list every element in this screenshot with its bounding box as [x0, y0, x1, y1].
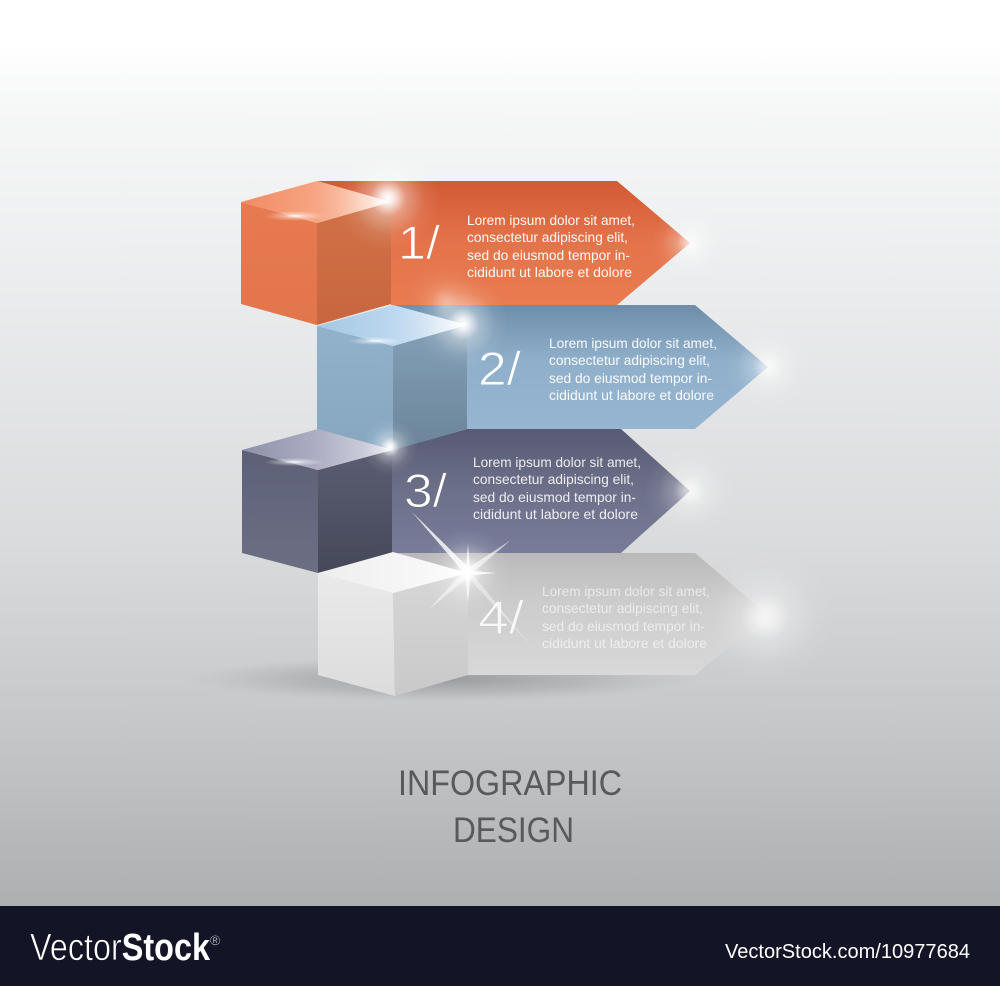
- cube 2: blue: [317, 305, 467, 450]
- step 2 number: 2/: [478, 342, 522, 395]
- step 4 number: 4/: [478, 591, 525, 644]
- step 2 text: consectetur adipiscing elit,: [549, 353, 710, 368]
- step 3 text: Lorem ipsum dolor sit amet,: [473, 455, 641, 470]
- step 1 text: cididunt ut labore et dolore: [467, 265, 632, 280]
- arrow 1 shape: [317, 181, 690, 305]
- arrow 3 shape: [392, 429, 690, 553]
- step 4 text: consectetur adipiscing elit,: [542, 601, 703, 616]
- title: [398, 764, 622, 850]
- step 1 number: 1/: [398, 216, 441, 269]
- step 2 text: sed do eiusmod tempor in-: [549, 371, 712, 386]
- step 4 text: cididunt ut labore et dolore: [542, 636, 707, 651]
- arrow 4 shape: [393, 553, 768, 675]
- step 2 text: Lorem ipsum dolor sit amet,: [549, 336, 717, 351]
- step 2 text: cididunt ut labore et dolore: [549, 388, 714, 403]
- ground shadow: [185, 656, 695, 702]
- panel: step 4 arrow: [393, 553, 768, 675]
- step 3 text: sed do eiusmod tempor in-: [473, 490, 636, 505]
- step 1 text: sed do eiusmod tempor in-: [467, 248, 630, 263]
- title line 1: INFOGRAPHIC: [398, 764, 622, 803]
- step 4 text: sed do eiusmod tempor in-: [542, 619, 705, 634]
- cube 4: white: [318, 552, 468, 696]
- step 3 text: consectetur adipiscing elit,: [473, 472, 634, 487]
- step 1 text: consectetur adipiscing elit,: [467, 230, 628, 245]
- light glows: [336, 146, 835, 687]
- cube 3: slate: [242, 429, 392, 573]
- cube 1: orange: [241, 181, 391, 325]
- footer id: VectorStock.com/10977684: [725, 941, 970, 963]
- step 4 text: Lorem ipsum dolor sit amet,: [542, 584, 710, 599]
- panel: step 1 arrow: [317, 181, 690, 305]
- panel: step 2 arrow: [393, 305, 768, 429]
- registered mark: ®: [210, 932, 221, 948]
- step 1 text: Lorem ipsum dolor sit amet,: [467, 213, 635, 228]
- step 3 text: cididunt ut labore et dolore: [473, 507, 638, 522]
- panel: step 3 arrow: [392, 429, 690, 553]
- footer bar: [0, 906, 1000, 986]
- arrow 2 shape: [393, 305, 768, 429]
- icon: star sparkle: [412, 512, 530, 645]
- title line 2: DESIGN: [453, 811, 574, 850]
- footer logo: VectorStock: [30, 927, 211, 969]
- step 3 number: 3/: [404, 464, 448, 517]
